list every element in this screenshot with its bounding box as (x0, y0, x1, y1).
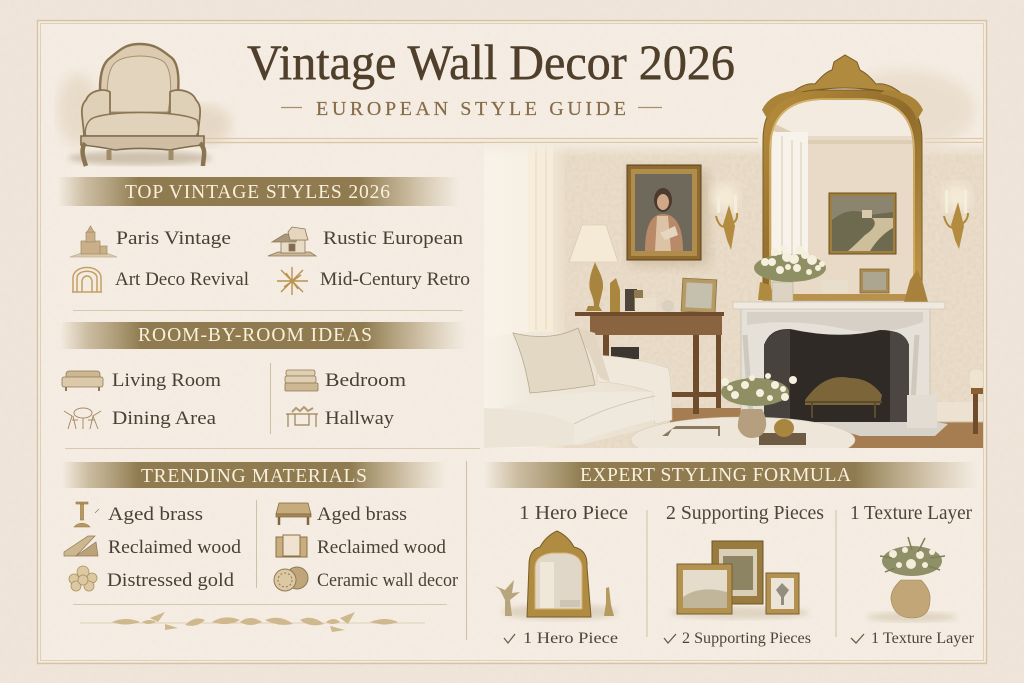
panel: trending materials (62, 462, 459, 591)
icon: paris tower (70, 226, 117, 257)
heading banner: trending materials (62, 462, 446, 488)
label: hallway: Hallway (325, 408, 395, 429)
wall sconce right (943, 183, 971, 249)
sofa (484, 328, 672, 448)
icon: small wooden table (276, 503, 311, 525)
panel: expert styling formula (484, 462, 978, 647)
icon: sofa (62, 371, 103, 391)
panel: room-by-room ideas (60, 322, 466, 429)
icon: bed (285, 370, 318, 391)
label: aged brass left: Aged brass (108, 504, 203, 525)
heading banner: trending materials: TRENDING MATERIALS (141, 466, 367, 487)
label: distressed gold: Distressed gold (107, 570, 235, 591)
subtitle: EUROPEAN STYLE GUIDE (316, 98, 626, 120)
icon: ceramic plates (274, 567, 308, 591)
label: reclaimed wood right: Reclaimed wood (317, 537, 446, 558)
icon: mid-century starburst (277, 267, 308, 295)
heading banner: room-by-room (60, 322, 466, 349)
illustration: armchair (58, 44, 231, 166)
label: living room: Living Room (112, 370, 221, 391)
icon: mini vase with flowers (867, 537, 957, 622)
heading banner: room-by-room: ROOM-BY-ROOM IDEAS (138, 325, 372, 346)
mirror (762, 55, 975, 300)
icon: rustic house (268, 227, 316, 256)
fireplace (733, 302, 948, 436)
console table ornaments (610, 278, 717, 313)
label: bedroom: Bedroom (325, 370, 406, 391)
lamp (569, 225, 618, 311)
icon: brass candlestick (74, 502, 99, 527)
wall (565, 148, 983, 448)
checklist: supporting pieces: 2 Supporting Pieces (682, 630, 811, 647)
heading banner: expert styling formula (484, 462, 978, 488)
heading banner: expert styling formula: EXPERT STYLING FORMULA (580, 465, 851, 486)
stool at right (970, 370, 983, 434)
checklist: texture layer: 1 Texture Layer (871, 630, 975, 647)
heading: texture layer: 1 Texture Layer (850, 502, 972, 524)
table vase and flowers (721, 373, 797, 438)
portrait painting (627, 165, 701, 260)
heading: supporting pieces: 2 Supporting Pieces (666, 502, 824, 524)
icon: distressed gold ornament (69, 566, 97, 591)
label: reclaimed wood left: Reclaimed wood (108, 537, 242, 558)
ornament: leaf flourish (80, 612, 425, 632)
icon: art deco arch (72, 268, 102, 292)
panel: room scene (484, 55, 983, 463)
label: art deco revival: Art Deco Revival (115, 269, 249, 290)
painting in mirror (829, 193, 896, 254)
label: mid-century retro: Mid-Century Retro (320, 269, 470, 290)
floor (670, 402, 983, 448)
icon: frames (276, 535, 307, 557)
icon: hallway console (286, 407, 318, 427)
icon: mini framed pictures (670, 541, 810, 619)
checklist: hero piece: 1 Hero Piece (523, 630, 618, 647)
icon: mini gilded mirror (495, 531, 618, 620)
panel: top vintage styles (58, 177, 470, 295)
heading banner: top vintage styles (58, 177, 460, 206)
mantel frames and flowers (754, 245, 928, 302)
header rule (205, 138, 983, 142)
icon: dining set (64, 408, 101, 429)
title: Vintage Wall Decor 2026 (247, 34, 735, 90)
label: rustic european: Rustic European (323, 228, 464, 249)
label: ceramic wall decor: Ceramic wall decor (317, 570, 459, 591)
heading banner: top vintage styles: TOP VINTAGE STYLES 2026 (125, 182, 390, 203)
label: aged brass right: Aged brass (317, 504, 407, 525)
coffee table (631, 416, 856, 448)
label: dining area: Dining Area (112, 408, 217, 429)
window and curtain (484, 143, 983, 448)
icon: wood planks (64, 536, 98, 556)
shadow behind portrait (630, 170, 708, 265)
wall sconce left (711, 183, 739, 250)
console table (575, 312, 724, 414)
label: paris vintage: Paris Vintage (116, 228, 231, 249)
heading: hero piece: 1 Hero Piece (519, 502, 628, 524)
